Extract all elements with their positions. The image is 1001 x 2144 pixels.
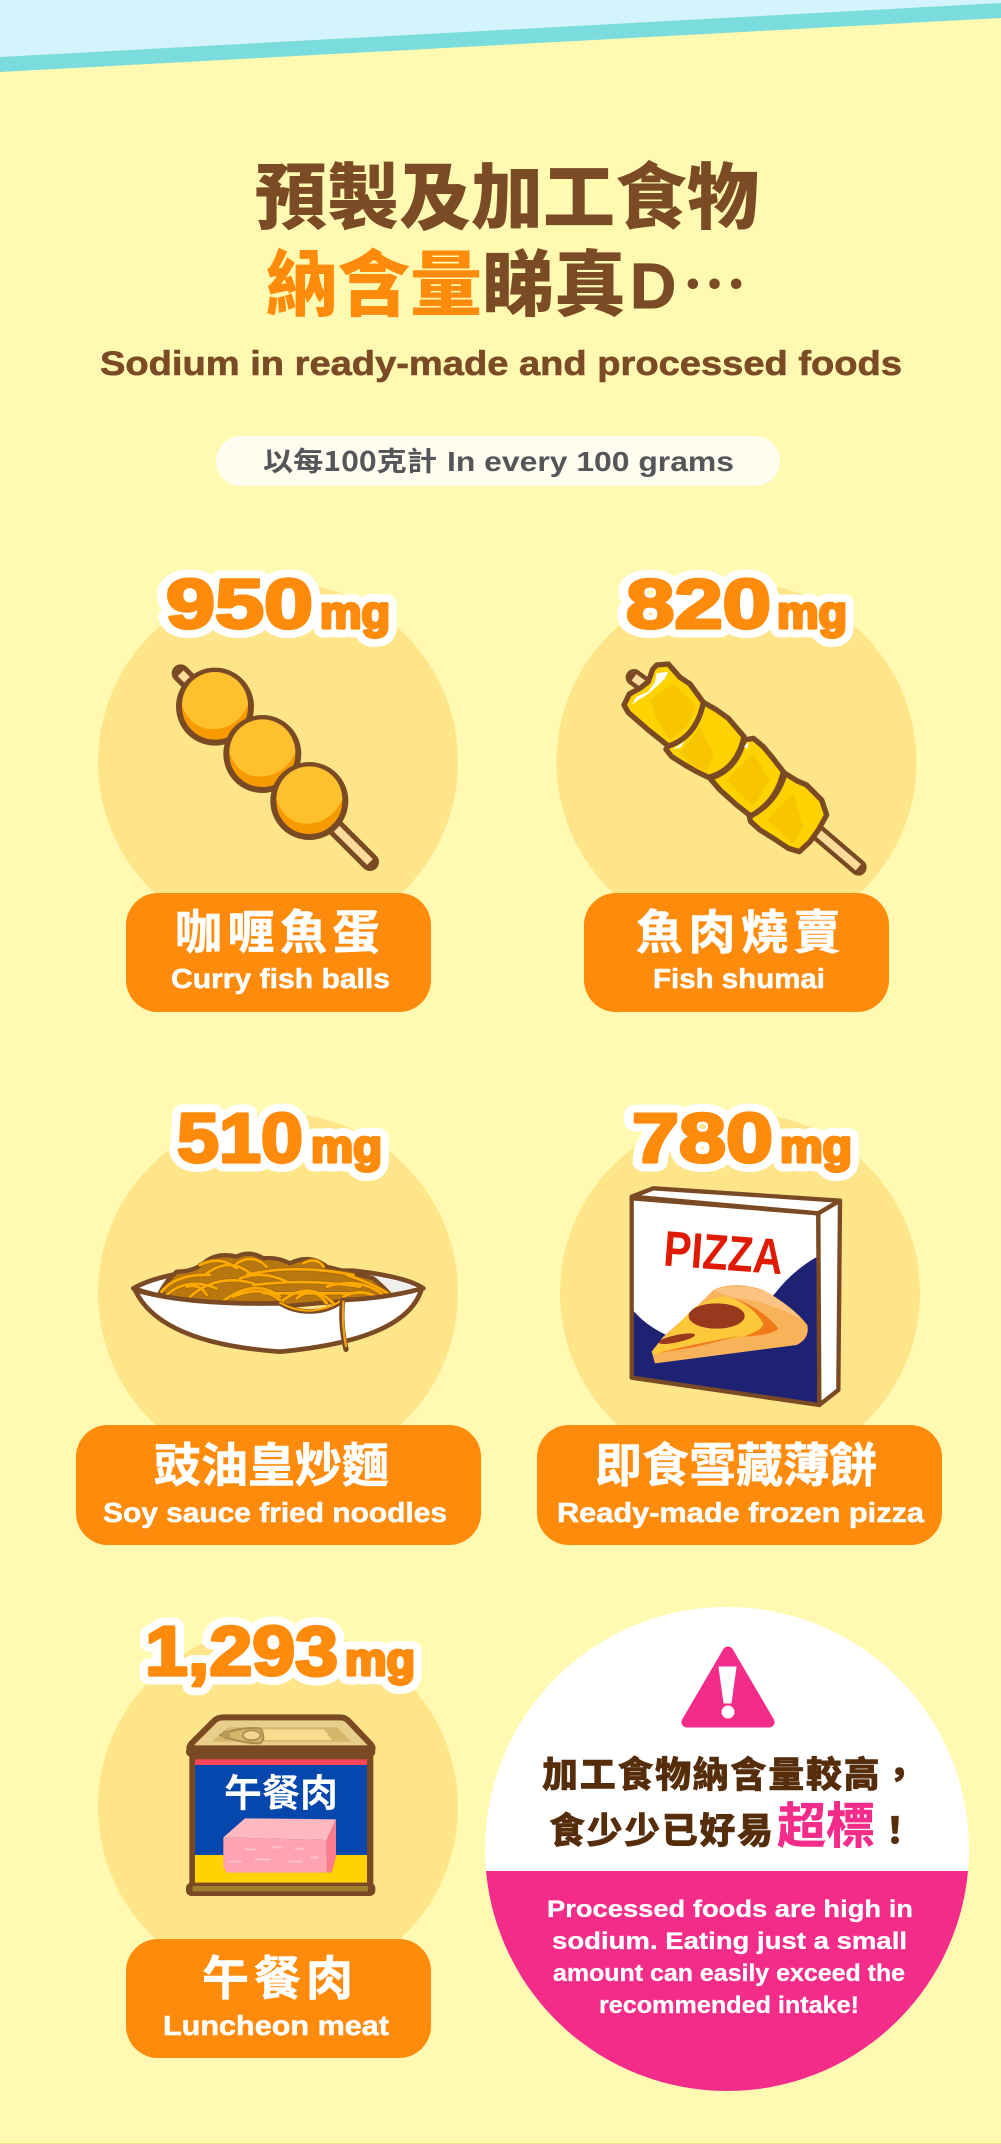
warning body text: sodium. Eating just a small — [552, 1928, 907, 1955]
value: 510mg: 510 — [177, 1099, 303, 1177]
unit note pill: In every 100 grams — [447, 446, 734, 477]
warning heading: 加工食物納含量較高， — [542, 1746, 919, 1798]
panel: curry fish balls — [98, 565, 458, 1012]
value: 510mg — [177, 1099, 382, 1177]
value: 950mg: 950 — [166, 565, 313, 643]
label pill — [537, 1425, 942, 1545]
value: 780mg: 780 — [632, 1099, 773, 1177]
warning body text: Processed foods are high in — [547, 1896, 913, 1923]
subtitle: Sodium in ready-made and processed foods — [100, 345, 902, 383]
value: 510mg: mg — [311, 1121, 382, 1172]
icon: luncheon meat can: 午餐肉 — [224, 1763, 338, 1818]
unit note pill: 以每100克計 — [263, 440, 437, 479]
label pill: 午餐肉 — [202, 1940, 358, 2009]
label pill: 即食雪藏薄餅 — [595, 1427, 877, 1496]
value: 1,293mg: 1,293 — [145, 1612, 338, 1690]
panel: ready-made frozen pizza — [537, 1099, 942, 1545]
title — [255, 139, 759, 331]
warning body text: recommended intake! — [599, 1992, 859, 2019]
label pill: Luncheon meat — [163, 2010, 389, 2041]
warning body text: amount can easily exceed the — [553, 1960, 905, 1987]
value: 1,293mg: mg — [345, 1634, 415, 1685]
unit note pill — [216, 436, 780, 486]
label pill: 咖喱魚蛋 — [175, 894, 385, 963]
value: 950mg — [166, 565, 390, 643]
label pill — [126, 893, 431, 1012]
title: 預製及加工食物 — [255, 139, 759, 244]
value: 510mg: mg — [311, 1121, 382, 1172]
value: 780mg: mg — [780, 1121, 852, 1172]
value: 1,293mg: mg — [345, 1634, 415, 1685]
value: 780mg: 780 — [632, 1099, 773, 1177]
icon: pizza box — [632, 1188, 840, 1405]
title: … — [682, 233, 747, 327]
value: 510mg: 510 — [177, 1099, 303, 1177]
title: D — [630, 250, 676, 322]
icon: luncheon meat can — [186, 1717, 375, 1896]
value: 820mg: 820 — [626, 565, 771, 643]
value: 820mg: mg — [777, 587, 847, 638]
top banner — [0, 0, 1001, 72]
background circle — [98, 1113, 458, 1473]
warning heading: 超標 — [777, 1787, 875, 1858]
panel: soy sauce fried noodles — [76, 1099, 481, 1545]
background circle — [98, 582, 458, 942]
label pill: 豉油皇炒麵 — [154, 1427, 389, 1496]
warning heading — [542, 1746, 919, 1858]
background circle — [560, 1113, 920, 1473]
label pill — [126, 1939, 431, 2058]
label pill: Ready-made frozen pizza — [557, 1497, 924, 1528]
label pill — [584, 893, 889, 1012]
value: 780mg — [632, 1099, 852, 1177]
label pill — [76, 1425, 481, 1545]
value: 820mg — [626, 565, 847, 643]
background circle — [98, 1627, 458, 1987]
warning heading: 食少少已好易 — [549, 1802, 775, 1854]
label pill: Fish shumai — [653, 963, 825, 994]
warning heading: ！ — [877, 1802, 913, 1854]
background circle — [556, 582, 916, 942]
value: 820mg: 820 — [626, 565, 771, 643]
icon: warning triangle — [687, 1652, 769, 1722]
callout: high sodium warning — [485, 1607, 969, 2091]
value: 820mg: mg — [777, 587, 847, 638]
value: 950mg: mg — [320, 587, 390, 638]
value: 1,293mg: 1,293 — [145, 1612, 338, 1690]
value: 780mg: mg — [780, 1121, 852, 1172]
label pill: Soy sauce fried noodles — [103, 1497, 447, 1528]
label pill: 魚肉燒賣 — [636, 894, 846, 963]
label pill: Curry fish balls — [171, 963, 390, 994]
icon: shumai skewer — [624, 664, 858, 867]
value: 950mg: 950 — [166, 565, 313, 643]
value: 1,293mg — [145, 1612, 415, 1690]
value: 950mg: mg — [320, 587, 390, 638]
panel: fish shumai — [556, 565, 916, 1012]
panel: luncheon meat — [98, 1612, 458, 2058]
icon: fish ball skewer — [179, 671, 370, 862]
icon: plate of noodles — [133, 1254, 423, 1352]
title: 納含量睇真 — [266, 226, 626, 331]
icon: pizza box: PIZZA — [662, 1220, 785, 1285]
warning body text — [547, 1896, 913, 2019]
